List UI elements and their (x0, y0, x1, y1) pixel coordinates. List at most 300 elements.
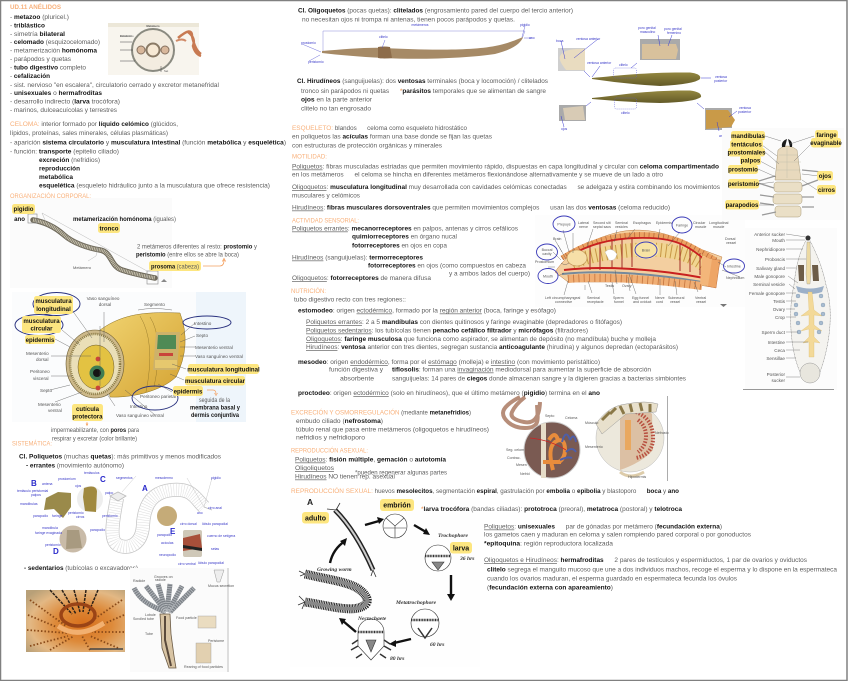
text block: poliquetos (19, 454, 222, 470)
tiny labels: faringe evaginada (35, 531, 62, 535)
stage captions: 60 hrs (430, 642, 444, 648)
heading: reproducción asexual: REPRODUCCIÓN ASEXUAL: (291, 446, 368, 454)
arrow: prosoma note (203, 258, 226, 266)
small labels: Second slit (593, 221, 611, 225)
text block: actividad sensorial (292, 218, 530, 282)
text block: poliquetos: Cl. Poliquetos (muchas quetas): más primitivos y menos modificados (19, 454, 222, 460)
plain labels: Intestino (130, 404, 148, 409)
tiny labels: peristomio (102, 514, 118, 518)
text block: motilidad (292, 154, 721, 212)
note: cutícula (51, 422, 139, 442)
text block: poliquetos: - errantes (movimiento autónomo) (26, 462, 124, 470)
diagram: leech internal anatomy: Proboscis (765, 257, 786, 262)
label: parapodios: parapodios (726, 202, 759, 209)
text block: general characteristics: - sist. nervioso "en escalera", circulatorio cerrado y excretor metanefridal (10, 82, 220, 89)
plain labels: Vaso sanguíneo (87, 296, 120, 301)
diagram: metanephridia: Hipodermis (628, 475, 646, 479)
text block: excreción: túbulo renal que pasa entre metámeros (oligoquetos e hirudíneos) (296, 426, 489, 434)
tiny labels: antena (42, 482, 52, 486)
plain labels: Septo (40, 388, 52, 393)
caption: metámeros diferentes (136, 244, 258, 258)
label: epidermis right: epidermis (174, 388, 203, 395)
text block: general characteristics: - metazoo (pluricel.) (10, 14, 69, 21)
diagram: leech internal anatomy: Sensillae (766, 356, 785, 361)
tiny labels: prostomium (58, 477, 76, 481)
tiny labels: acículas (161, 541, 174, 545)
diagram: annelid section (12, 292, 260, 422)
small labels (535, 221, 744, 304)
stage captions: 36 hrs (459, 556, 474, 562)
small labels: Epidermis (656, 221, 672, 225)
label: adulto: adulto (305, 516, 326, 522)
label: larva: larva (453, 546, 469, 552)
stage captions: Nectochaete (357, 616, 387, 622)
text block: motilidad: Poliquetos: fibras musculadas estriadas que permiten movimiento rápido, dispuestas en capa longitudinal y circular con celoma compartimentado (292, 164, 719, 170)
diagram: earthworm: pigidio (520, 23, 530, 27)
label: musculatura longitudinal right (187, 364, 260, 374)
text block: nutrición: Oligoquetos: faringe musculosa que funciona como aspirador, se alimentan de depósito (no mandíbula) buche y molleja (306, 336, 656, 343)
small labels: cavity (542, 252, 552, 256)
text block: actividad sensorial: y a ambos lados del cuerpo) (449, 270, 530, 278)
diagram: metanephridia (503, 396, 669, 481)
plain labels: Intestino (194, 321, 212, 326)
small labels: Ovary (622, 284, 632, 288)
diagram: leech external anatomy: femenino (667, 31, 681, 35)
small labels: Prostomium (535, 260, 554, 264)
diagram: metanephridia: Nefrosto (655, 431, 669, 435)
tiny labels: peristomio (45, 543, 61, 547)
label: prosoma (149, 261, 201, 271)
photo: parapodium (157, 506, 177, 526)
text block: reproducción sexual: Poliquetos: unisexuales par de gónadas por metámero (fecundación externa) (484, 524, 722, 530)
tiny labels: tentáculos (84, 471, 100, 475)
diagram: sedentary polychaete: Tube (145, 632, 153, 636)
text block: reproducción sexual: cuando los ovarios maduran, el esperma guardado en espermateca fecunda los óvulos (487, 576, 738, 582)
tiny labels: parapodio (33, 514, 48, 518)
diagram: leech internal anatomy (743, 228, 837, 390)
plain labels: ventral (48, 408, 62, 413)
diagram: earthworm (301, 23, 535, 64)
tiny labels: cuerno de setígera (207, 534, 235, 538)
text block: general characteristics (10, 2, 220, 114)
label: ojos: ojos (819, 173, 832, 180)
small labels: Prepuys (557, 222, 571, 226)
diagram: leech internal anatomy: Anterior sucker (754, 232, 785, 237)
diagram: leech external anatomy (556, 26, 752, 138)
text block: excreción: embudo ciliado (nefrostoma) (296, 418, 383, 425)
photo: fan worm (26, 590, 125, 652)
text block: reproducción sexual: *larva trocófora (bandas ciliadas): prototroca (preoral), metatroca (postoral) y telotroca (421, 506, 682, 513)
note: seguida de la membrana basal: membrana basal y (190, 404, 240, 412)
diagram: leech internal anatomy: Testis (773, 299, 786, 304)
diagram: leech internal anatomy: Intestine (768, 340, 785, 345)
text block: actividad sensorial: Poliquetos errantes: mecanorreceptores en palpos, antenas y cirros cefálicos (292, 226, 519, 232)
tiny labels: lóbulo parapodial (202, 522, 228, 526)
text block: hirudineos: Cl. Hirudíneos (sanguijuelas): dos ventosas terminales (boca y locomoción) / clitelados (297, 78, 549, 85)
small labels: Intestine (727, 264, 741, 268)
small labels: muscle (713, 225, 724, 229)
diagram: leech internal anatomy: Sperm duct (762, 330, 786, 335)
text block: motilidad: Hirudíneos: fibras musculares dorsoventrales que permiten movimientos complejos usan las dos ventosas (celoma reducido) (292, 204, 670, 212)
label: musculatura longitudinal: musculatura (35, 298, 72, 305)
text block: hirudineos: tronco sin parápodos ni quetas *parásitos temporales que se alimentan de sangre (301, 88, 546, 95)
label: palpos: palpos (741, 158, 761, 165)
adult worm (335, 510, 373, 570)
diagram: metanephridia: Nefrid (520, 472, 530, 476)
label: adulto (302, 512, 329, 524)
small labels: Ventral (695, 296, 706, 300)
label: cutícula protectora: cutícula (76, 406, 100, 413)
text block: celoma: - aparición sistema circulatorio y musculatura intestinal (función metabólica y esquelética) (10, 140, 286, 146)
small labels: cord (656, 300, 663, 304)
small labels: Nerve (655, 296, 665, 300)
stage captions: 80 hrs (390, 656, 404, 662)
diagram: metanephridia: Celoma (565, 416, 577, 420)
text block: general characteristics: - simetría bilateral (10, 31, 65, 38)
small labels: connective (555, 300, 572, 304)
heading: celoma: CELOMA: interior formado por líquido celómico (glúcidos, (10, 121, 178, 128)
text block: reproducción sexual: (fecundación externa con apareamiento) (487, 584, 613, 592)
text block: motilidad: musculares y celómicos (292, 192, 361, 200)
text block: general characteristics: - triblástico (10, 22, 45, 30)
text block: esqueleto (292, 125, 493, 150)
caption: metámeros diferentes: peristomio (entre ellos se abre la boca) (136, 252, 239, 258)
note: cutícula: respirar y excretar (color brillante) (52, 436, 137, 442)
text block: celoma: excreción (nefridios) (39, 157, 100, 164)
diagram: metanephridia: Seg. celom (506, 448, 524, 452)
small labels: Buccal (542, 248, 553, 252)
label: musculatura longitudinal (34, 296, 73, 314)
diagram: leech internal anatomy: Posterior (767, 372, 785, 377)
text block: celoma: lípidos, proteínas, sales minerales, células plasmáticas) (10, 130, 168, 137)
larval stages (351, 514, 451, 660)
letter A: A (307, 497, 313, 507)
text block: nutrición: tubo digestivo recto con tres regiones:: (294, 296, 406, 304)
small labels: Mouth (543, 274, 553, 278)
diagram: metanephridia: Contrac. (507, 456, 521, 460)
tiny labels: faringe (52, 514, 62, 518)
body tube (100, 313, 185, 397)
diagram: leech internal anatomy: Male gonopore (754, 274, 785, 279)
text block: actividad sensorial: fotorreceptores en ojos (como compuestos en cabeza (368, 262, 526, 270)
text block: general characteristics: - desarrollo indirecto (larva trocófora) (10, 98, 120, 106)
diagram: metamere cross-section: Metámero (146, 24, 160, 28)
text block: reproducción sexual (291, 486, 837, 592)
text block: general characteristics: - tubo digestivo completo (10, 64, 86, 72)
diagram: earthworm: metámeros (412, 23, 429, 27)
diagram: sedentary polychaete: radiole (155, 578, 166, 582)
tiny labels: segmentos (116, 476, 133, 480)
text block: general characteristics: - metamerización homónoma (10, 48, 97, 54)
caption: metamerización homónoma: metamerización homónoma (iguales) (73, 216, 176, 223)
tiny labels (17, 471, 235, 566)
plain labels: Mesenterio (38, 402, 61, 407)
small labels: Subneural (668, 296, 685, 300)
small labels: Seminal (615, 221, 628, 225)
text block: nutrición: tiflosolis: forman una invaginación mediodorsal para aumentar la superficie de absorción (392, 366, 651, 374)
label: tronco: tronco (100, 226, 119, 232)
tiny labels: palpo (105, 491, 113, 495)
diagram: metanephridia: Septo (545, 414, 554, 418)
label: prostomiales: prostomiales (728, 150, 766, 156)
diagram: earthworm: clitelo (379, 35, 388, 39)
photo: C (77, 486, 103, 512)
text block: celoma: esquelética (esqueleto hidráulico junto a la musculatura que ofrece resistencia) (39, 182, 270, 190)
diagram: leech external anatomy: masculino (640, 30, 655, 34)
photo: B (44, 492, 71, 518)
small labels: Testis (605, 284, 614, 288)
text block: excreción: EXCRECIÓN Y OSMORREGULACIÓN (mediante metanefridios) (291, 408, 471, 416)
diagram: leech internal anatomy: Mouth (772, 238, 785, 243)
diagram: leech external anatomy: clitelo (619, 63, 628, 67)
plain labels: dorsal (99, 302, 111, 307)
label: peristomio: peristomio (728, 181, 759, 188)
small labels: nerve (579, 225, 588, 229)
text block: nutrición: Poliquetos errantes: 2 a 5 mandíbulas con dientes quitinosos y faringe evaginable (depredadores o fitófagos) (306, 319, 622, 326)
text block: reproducción sexual: REPRODUCCIÓN SEXUAL: huevos mesolecitos, segmentación espiral, gastrulación por embolia o epibolia y blastoporo boca y ano (291, 486, 679, 495)
diagram: polychaete internal anatomy (535, 215, 745, 307)
text block: excreción (291, 408, 489, 442)
text block: general characteristics: - cefalización (10, 73, 50, 80)
text block: nutrición: estomodeo: origen ectodérmico, formado por la región anterior (boca, faringe y esófago) (298, 308, 556, 314)
text block: general characteristics: - celomado (esquizocelomado) (10, 39, 100, 46)
label: epidermis: epidermis (26, 337, 55, 344)
diagram: sedentary polychaete: Rearing of food particles (184, 665, 223, 669)
text block: actividad sensorial: quimiorreceptores en órgano nucal (352, 234, 458, 240)
tiny labels: mandíbula (42, 526, 58, 530)
text block: reproducción asexual: Poliquetos: fisión múltiple, gemación o autotomía (295, 456, 446, 464)
text block: nutrición: mesodeo: origen endodérmico, forma por el estómago (molleja) e intestino (con movimiento peristáltico) (298, 359, 600, 366)
diagram: sedentary polychaete: Grooves on (154, 575, 173, 579)
text block: nutrición: absorbente (340, 376, 374, 382)
text block: nutrición: sanguijuelas: 14 pares de ciegos donde almacenan sangre y la digieren gracias a bacterias simbiontes (392, 376, 687, 382)
text block: celoma: reproducción (39, 166, 80, 172)
diagram: leech internal anatomy: Ovary (773, 307, 786, 312)
text block: celoma: - función: transporte (epitelio ciliado) (10, 148, 119, 156)
text block: esqueleto: ESQUELETO: blandos celoma como esqueleto hidrostático (292, 125, 467, 132)
plain labels (26, 296, 243, 418)
diagram: metamere cross-section (108, 23, 201, 75)
letters: C (100, 475, 106, 484)
label: larva (450, 542, 472, 554)
small labels: Sperm (613, 296, 624, 300)
text block: motilidad: Oligoquetos: musculatura longitudinal muy desarrollada con cavidades celómicas conectadas se adelgaza y estira combinando los movimientos (292, 184, 721, 191)
diagram: leech external anatomy: ano (719, 134, 725, 138)
caption: metámeros diferentes: 2 metámeros diferentes al resto: prostomio y (137, 244, 258, 250)
face (66, 330, 124, 398)
diagram: sedentary polychaete: Scrolled tube (133, 617, 154, 621)
label: cutícula protectora: protectora (72, 414, 103, 420)
small labels: and oviduct (633, 300, 651, 304)
diagram: worm body regions: Metámero (73, 265, 92, 270)
tiny labels: ojos (75, 484, 82, 488)
diagram: leech external anatomy: ventosa anterior (587, 61, 612, 65)
stage captions (317, 533, 474, 662)
letters (31, 475, 176, 556)
tiny labels: cirros (76, 515, 85, 519)
label: tronco (98, 223, 120, 233)
diagram: leech external anatomy: ventosa (715, 75, 727, 79)
text block: general characteristics: - marinos, dulceacuícolas y terrestres (10, 107, 118, 114)
label: ano: ano (14, 216, 25, 223)
label: pigidio: pigidio (14, 206, 34, 213)
small labels: Brain (642, 248, 650, 252)
label: embrión: embrión (383, 502, 411, 510)
diagram: sedentary polychaete: Lobule (145, 613, 156, 617)
text block: nutrición: función digestiva y (329, 366, 384, 374)
tiny labels: cirro ventral (178, 562, 196, 566)
tiny labels: peristomio (68, 511, 84, 515)
diagram: leech external anatomy: boca (556, 39, 563, 43)
diagram: leech internal anatomy: Female gonopore (749, 291, 785, 296)
small labels: vessel (670, 300, 680, 304)
text block: reproducción asexual (291, 446, 448, 480)
diagram: leech external anatomy: poro genital (638, 26, 656, 30)
small labels: Faringe (676, 224, 688, 228)
text block: celoma: metabólica (39, 174, 73, 181)
diagram: earthworm: peristomio (308, 60, 324, 64)
label: embrión (380, 499, 414, 511)
heading: sedentarios: - sedentarios (tubícolas o excavadores) (24, 565, 138, 572)
tiny labels: palpos (31, 493, 41, 497)
diagram: leech external anatomy: ventosa anterior (576, 37, 601, 41)
diagram: leech external anatomy: posterior (714, 79, 728, 83)
plain labels: Septo (196, 333, 208, 338)
label: musculatura longitudinal right: musculatura longitudinal (187, 366, 260, 373)
label: musculatura circular (22, 316, 61, 333)
plain labels: dorsal (36, 357, 49, 362)
letters: D (53, 547, 59, 556)
note: cutícula: impermeabilizante, con poros para (51, 427, 139, 434)
small labels: Nephridium (726, 276, 744, 280)
tiny labels: mandíbulas (20, 502, 38, 506)
tiny labels: neuropodio (159, 553, 176, 557)
plain labels: Mesenterio ventral (195, 345, 233, 350)
diagram: sedentary polychaete: Radiole (133, 579, 145, 583)
diagram: leech internal anatomy: Nephridiopore (756, 247, 785, 252)
small labels: Brain (553, 237, 561, 241)
diagram: metanephridia: Mesenterio (585, 445, 603, 449)
label: faringe evaginable: faringe (816, 132, 837, 139)
label: mandíbulas: mandíbulas (731, 133, 766, 140)
diagram: leech internal anatomy: Seminal vesicle (753, 282, 785, 287)
text block: general characteristics: - parápodos y quetas (10, 56, 72, 63)
letters: B (31, 479, 37, 488)
label: tentáculos: tentáculos (731, 142, 762, 149)
small labels: funnel (614, 300, 624, 304)
tiny labels: setas (211, 547, 219, 551)
text block: esqueleto: en poliquetos las acículas forman una base donde se fijan las quetas (292, 134, 493, 140)
small labels: Circular (693, 221, 706, 225)
diagram: leech internal anatomy: Salivary gland (756, 266, 785, 271)
diagram: metamere cross-section: Ectodermo (120, 34, 134, 38)
diagram: sedentary polychaete: Peristome (208, 639, 224, 643)
text block: motilidad: en los metámeros el celoma se hincha en diferentes metámeros flexionándose alternativamente y se mueve de un lado a otro (292, 172, 663, 178)
label: pigidio (12, 204, 35, 214)
heading: organización corporal: ORGANIZACIÓN CORPORAL: (10, 191, 91, 200)
text block: hirudineos (297, 78, 549, 112)
text block: nutrición: Poliquetos sedentarios: los tubícolas tienen penacho cefálico filtrador y micrófagos (filtradores) (306, 328, 588, 334)
plain labels: Peritoneo (30, 369, 50, 374)
diagram: leech internal anatomy: Ceca (774, 348, 785, 353)
label: prosoma: prosoma (cabeza) (151, 264, 199, 270)
small labels: vesicles (615, 225, 628, 229)
text block: reproducción sexual: los gametos caen y maduran en celoma y salen rompiendo pared corporal o por gonoductos (484, 532, 752, 538)
note: seguida de la membrana basal: seguida de la (199, 397, 230, 404)
tiny labels: parapodio (90, 528, 105, 532)
small labels: Longitudinal (709, 221, 729, 225)
label: cutícula protectora (72, 404, 103, 421)
letters: A (142, 484, 148, 493)
text block: nutrición (291, 286, 687, 397)
stage captions: Growing worm (317, 567, 352, 573)
blue ovals (536, 216, 744, 284)
diagram: leech external anatomy: posterior (738, 110, 752, 114)
arrows (330, 521, 451, 643)
leaders (50, 310, 195, 415)
text block: reproducción asexual: Hirudíneos NO tienen rep. asexual (295, 474, 396, 480)
plain labels: visceral (33, 376, 49, 381)
diagram: leech external anatomy: poro genital (664, 27, 682, 31)
text block: actividad sensorial: fotorreceptores en ojos en copa (352, 242, 447, 250)
text block: reproducción asexual: *pueden regenerar algunas partes (355, 470, 448, 476)
diagram: polychaete errant anatomy (17, 471, 235, 566)
heading: sistemática: SISTEMÁTICA: (12, 438, 52, 448)
label: prostomio: prostomio (728, 167, 758, 174)
small labels: Left circumpharyngeal (545, 296, 581, 300)
small labels: Esophagus (633, 221, 651, 225)
text block: esqueleto: con estructuras de protección orgánicas y minerales (292, 142, 443, 150)
small labels: vessel (726, 241, 736, 245)
label: epidermis right (173, 386, 203, 396)
small labels: muscle (695, 225, 706, 229)
diagram: earthworm: ano (529, 36, 535, 40)
text block: excreción: nefridios y nefridioporo (296, 434, 365, 442)
plain labels: Vaso sanguíneo ventral (116, 413, 164, 418)
diagram: life cycle (290, 497, 480, 667)
plain labels: Vaso sanguíneo ventral (195, 354, 243, 359)
small labels: Dorsal (725, 237, 736, 241)
small labels: Egg funnel (632, 296, 649, 300)
tiny labels: parapodio (157, 533, 172, 537)
diagram: worm body regions (10, 198, 258, 288)
plain labels: Mesenterio (26, 351, 49, 356)
label: cirros: cirros (818, 187, 836, 194)
diagram: leech external anatomy: ventosa (739, 106, 751, 110)
diagram: metanephridia: Mesen (516, 463, 527, 467)
tiny labels: tentáculo peristomial (17, 489, 48, 493)
plain labels: Segmento (144, 302, 165, 307)
text block: nutrición: Hirudíneos: ventosa anterior con tres dientes, segregan sustancia anticoagulante (hirudina) y algunos depredan (ectoparásitos) (306, 344, 678, 351)
tiny labels: lóbulo parapodial (198, 561, 224, 565)
text block: hirudineos: ojos en la parte anterior (301, 96, 373, 104)
small labels: receptacle (587, 300, 604, 304)
title: UD.11 ANÉLIDOS (10, 2, 61, 11)
text block: reproducción sexual: Oligoquetos e Hirudíneos: hermafroditas 2 pares de testículos y espermiductos, 1 par de ovarios y oviductos (484, 557, 808, 564)
diagram: leech internal anatomy: sucker (771, 378, 785, 383)
text block: general characteristics: - unisexuales o hermafroditas (10, 90, 102, 97)
diagram: sedentary polychaete: Food particle (176, 616, 197, 620)
tiny labels: cirro dorsal (180, 522, 197, 526)
diagram: earthworm: prostomio (301, 41, 316, 45)
text block: celoma (10, 121, 286, 190)
text block: reproducción sexual: *epitoquina: región reproductora localizada (484, 540, 613, 548)
small labels: vessel (696, 300, 706, 304)
text block: actividad sensorial: Oligoquetos: fotorreceptores de manera difusa (292, 275, 431, 282)
letters: E (170, 527, 176, 536)
tiny labels: ano (197, 511, 203, 515)
diagram: nereid head (722, 128, 844, 220)
